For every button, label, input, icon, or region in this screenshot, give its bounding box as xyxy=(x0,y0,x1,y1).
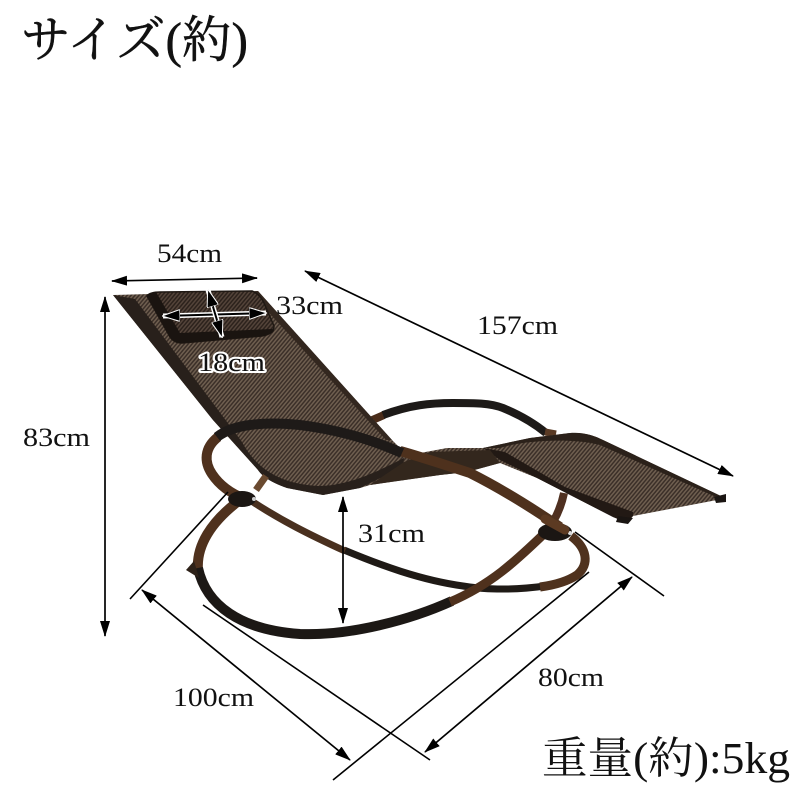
hubs xyxy=(228,491,256,507)
chair illustration xyxy=(113,291,726,634)
label 33cm: 33cm xyxy=(276,290,343,320)
label 54cm: 54cm xyxy=(157,238,222,268)
base foot xyxy=(186,561,199,578)
front frame tube xyxy=(207,424,560,527)
seat fabric xyxy=(113,291,726,524)
front rocker tube xyxy=(198,476,548,634)
rear strut xyxy=(553,493,564,522)
height arrow 83cm xyxy=(104,297,106,636)
label 83cm: 83cm xyxy=(23,422,90,452)
pillow depth arrow xyxy=(208,290,222,337)
label 31cm: 31cm xyxy=(358,518,425,548)
label 157cm: 157cm xyxy=(477,310,558,340)
weight caption: 重量(約):5kg xyxy=(542,734,790,783)
width arrow 54cm xyxy=(112,278,257,281)
label 100cm: 100cm xyxy=(173,682,254,712)
pillow body xyxy=(147,291,274,343)
label 80cm: 80cm xyxy=(538,662,604,692)
back ring tube xyxy=(370,403,556,434)
base arrow 80cm xyxy=(425,577,632,752)
centre post xyxy=(452,452,461,472)
pillow width arrow xyxy=(163,313,266,316)
clearance arrow 31cm xyxy=(342,497,344,623)
label 18cm: 18cm xyxy=(198,347,265,377)
sling edge shading xyxy=(113,295,404,495)
headrest pillow xyxy=(147,291,274,343)
headrest-to-seat sling xyxy=(113,291,723,522)
pillow shadow edge xyxy=(147,292,274,343)
title: サイズ(約) xyxy=(21,12,248,68)
depth arrow 100cm xyxy=(142,590,350,760)
extension lines xyxy=(130,492,664,780)
rear rocker tube xyxy=(250,500,585,589)
dimension lines and labels xyxy=(23,238,733,780)
length arrow 157cm xyxy=(305,271,733,476)
